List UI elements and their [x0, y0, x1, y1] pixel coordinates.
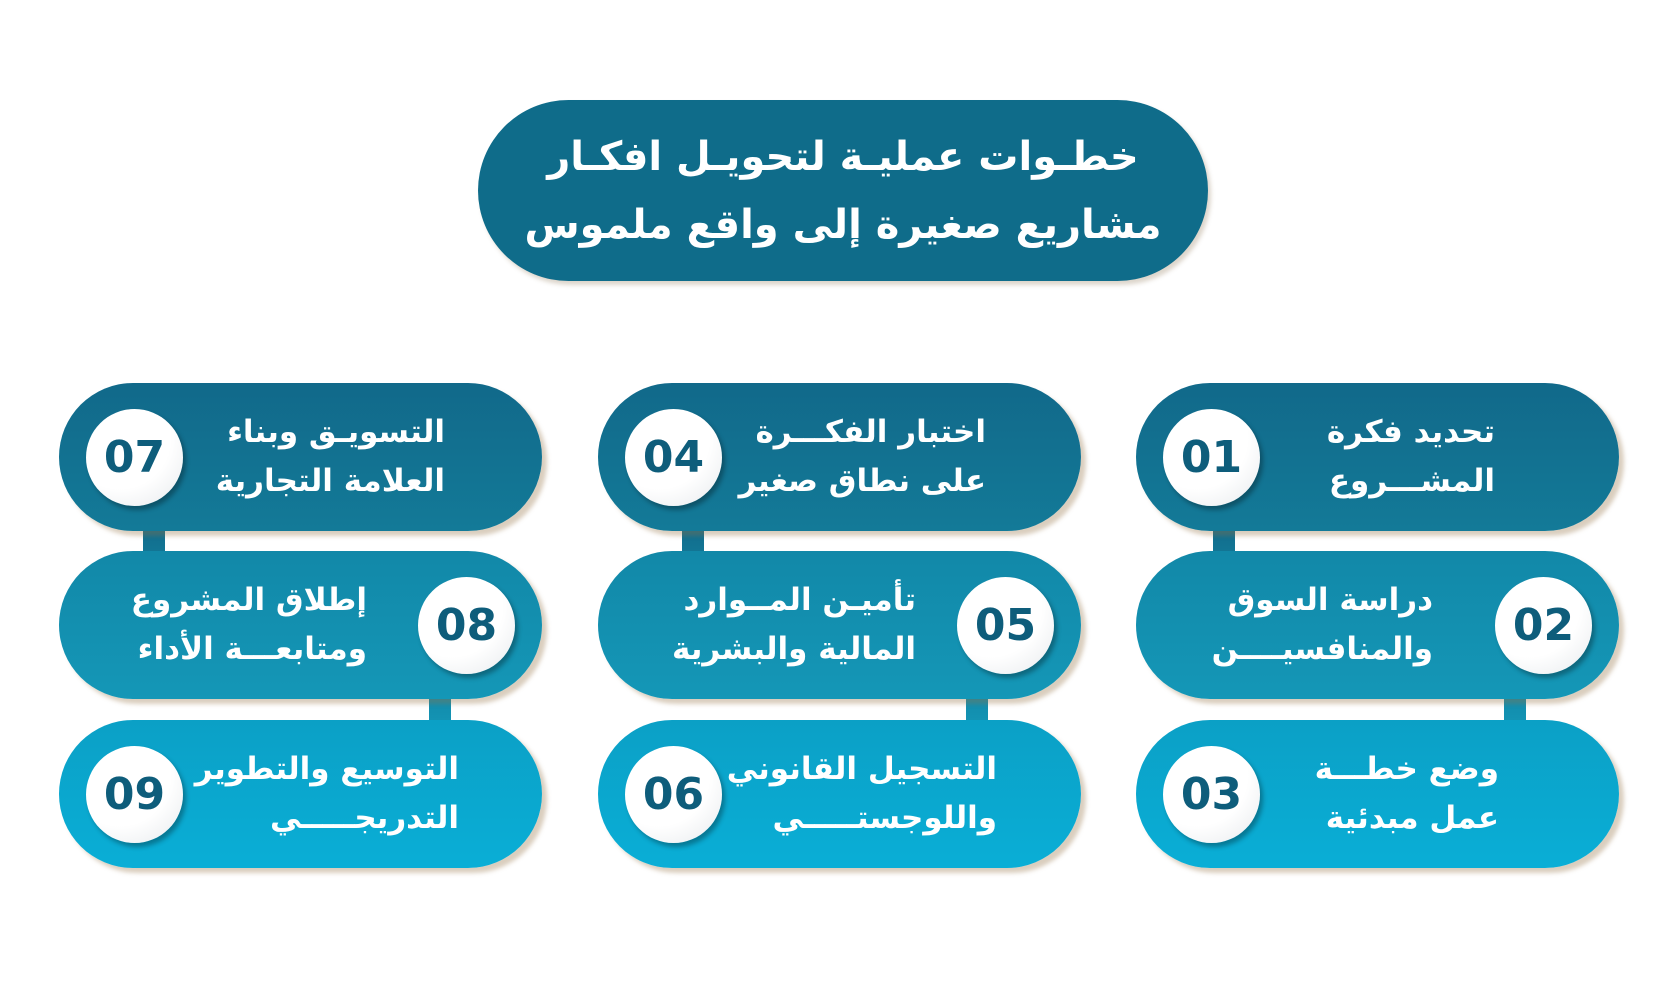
text 03: عمل مبدئية	[1326, 800, 1499, 836]
text 07: العلامة التجارية	[216, 463, 445, 499]
number 06	[625, 746, 722, 843]
text 04: على نطاق صغير	[739, 463, 986, 499]
number 02	[1495, 577, 1592, 674]
number 04: 04	[643, 432, 704, 483]
number 05	[957, 577, 1054, 674]
text 05	[672, 579, 916, 667]
number 08	[418, 577, 515, 674]
text 05: تأميـن المــوارد	[684, 582, 916, 618]
number 03: 03	[1181, 769, 1242, 820]
panel: step 02	[1136, 551, 1619, 699]
panel: step 09	[59, 720, 542, 868]
title: خطـوات عمليـة لتحويـل افكـار	[547, 134, 1139, 180]
number 09	[86, 746, 183, 843]
panel: step 04	[598, 383, 1081, 531]
text 09	[193, 751, 459, 836]
number 04	[625, 409, 722, 506]
text 08: إطلاق المشروع	[131, 582, 367, 618]
panel: step 01	[1136, 383, 1619, 531]
panel: step 07	[59, 383, 542, 531]
text 04	[737, 414, 986, 499]
panel: step 03	[1136, 720, 1619, 868]
title: مشاريع صغيرة إلى واقع ملموس	[524, 202, 1162, 248]
text 01: تحديد فكرة	[1327, 414, 1495, 450]
number 07: 07	[104, 432, 165, 483]
panel: step 05	[598, 551, 1081, 699]
number 07	[86, 409, 183, 506]
text 07	[216, 414, 445, 499]
number 02: 02	[1513, 600, 1574, 651]
text 02: والمنافسيــــن	[1212, 631, 1433, 667]
number 03	[1163, 746, 1260, 843]
text 06	[727, 751, 997, 836]
text 03: وضع خطـــة	[1315, 751, 1499, 787]
number 01	[1163, 409, 1260, 506]
connectors	[1213, 522, 1235, 562]
text 05: المالية والبشرية	[672, 631, 916, 667]
text 09: التوسيع والتطوير	[195, 751, 459, 787]
number 01: 01	[1181, 432, 1242, 483]
text 02: دراسة السوق	[1228, 582, 1433, 618]
text 03	[1315, 751, 1499, 836]
number 05: 05	[975, 600, 1036, 651]
text 02	[1212, 582, 1433, 667]
text 08	[131, 582, 367, 667]
number 09: 09	[104, 769, 165, 820]
text 07: التسويـق وبناء	[227, 414, 445, 450]
text 04: اختبار الفكـــرة	[755, 414, 986, 450]
text 08: ومتابعـــة الأداء	[138, 631, 367, 667]
text 01	[1327, 414, 1495, 499]
panel: step 06	[598, 720, 1081, 868]
title	[478, 100, 1208, 281]
number 08: 08	[436, 600, 497, 651]
text 09: التدريجـــــي	[270, 800, 459, 836]
number 06: 06	[643, 769, 704, 820]
panel: step 08	[59, 551, 542, 699]
text 06: التسجيل القانوني	[727, 751, 997, 787]
text 01: المشـــروع	[1329, 463, 1495, 499]
text 06: واللوجستـــــي	[772, 800, 997, 836]
